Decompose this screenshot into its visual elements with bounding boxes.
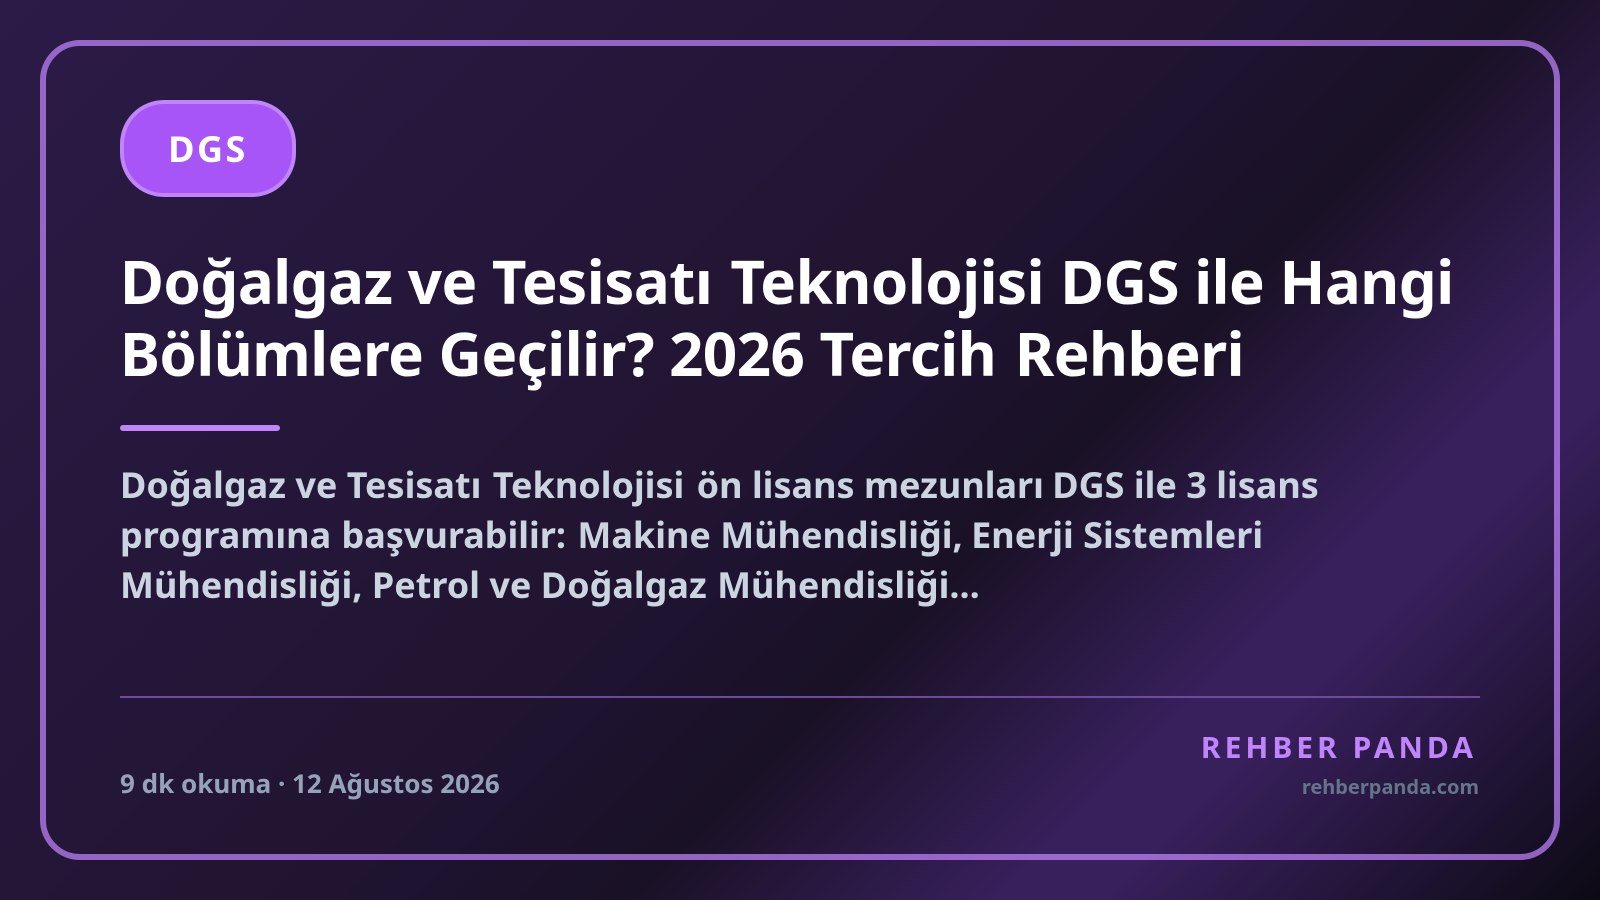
description: lisans — [1216, 460, 1319, 509]
title: ve — [408, 240, 477, 322]
footer divider — [120, 696, 1480, 698]
badge: DGS — [120, 100, 296, 197]
description: ile — [1134, 460, 1177, 509]
description: Mühendisliği, — [120, 560, 362, 609]
title: DGS — [1060, 240, 1179, 322]
description: başvurabilir: — [342, 510, 566, 559]
description: Enerji — [971, 510, 1074, 559]
description: Mühendisliği, — [720, 510, 963, 559]
title — [120, 240, 1454, 394]
description: ve — [295, 460, 337, 509]
title: Hangi — [1279, 240, 1454, 322]
title: Tesisatı — [492, 240, 712, 322]
description: programına — [120, 510, 331, 559]
reading time and date: · — [278, 765, 285, 801]
title: ile — [1194, 240, 1264, 322]
title: Rehberi — [1015, 312, 1244, 394]
reading time and date: 2026 — [440, 765, 500, 801]
reading time and date: 12 — [292, 765, 322, 801]
brand name: PANDA — [1353, 726, 1477, 767]
reading time and date: dk — [142, 765, 174, 801]
reading time and date: okuma — [181, 765, 271, 801]
description: Doğalgaz — [120, 460, 286, 509]
accent bar — [120, 425, 280, 431]
brand name: REHBER — [1201, 726, 1341, 767]
website: rehberpanda.com — [1302, 773, 1479, 800]
description: ve — [489, 560, 531, 609]
brand name — [1201, 726, 1477, 767]
title: Geçilir? — [439, 312, 654, 394]
title: Tercih — [819, 312, 996, 394]
description: Sistemleri — [1083, 510, 1263, 559]
reading time and date: Ağustos — [329, 765, 434, 801]
description: Teknolojisi — [493, 460, 684, 509]
description: lisans — [752, 460, 855, 509]
title: Teknolojisi — [730, 240, 1044, 322]
title: Doğalgaz — [120, 240, 393, 322]
description: DGS — [1052, 460, 1125, 509]
description: Mühendisliği... — [717, 560, 980, 609]
reading time and date: 9 — [120, 765, 135, 801]
description: mezunları — [864, 460, 1044, 509]
description: Tesisatı — [347, 460, 481, 509]
description: Petrol — [372, 560, 480, 609]
reading time and date — [120, 765, 500, 801]
description: Makine — [577, 510, 711, 559]
badge: DGS: DGS — [168, 124, 248, 173]
title: Bölümlere — [120, 312, 423, 394]
description — [120, 460, 1319, 609]
description: 3 — [1186, 460, 1207, 509]
description: Doğalgaz — [541, 560, 707, 609]
title: 2026 — [669, 312, 804, 394]
description: ön — [697, 460, 743, 509]
